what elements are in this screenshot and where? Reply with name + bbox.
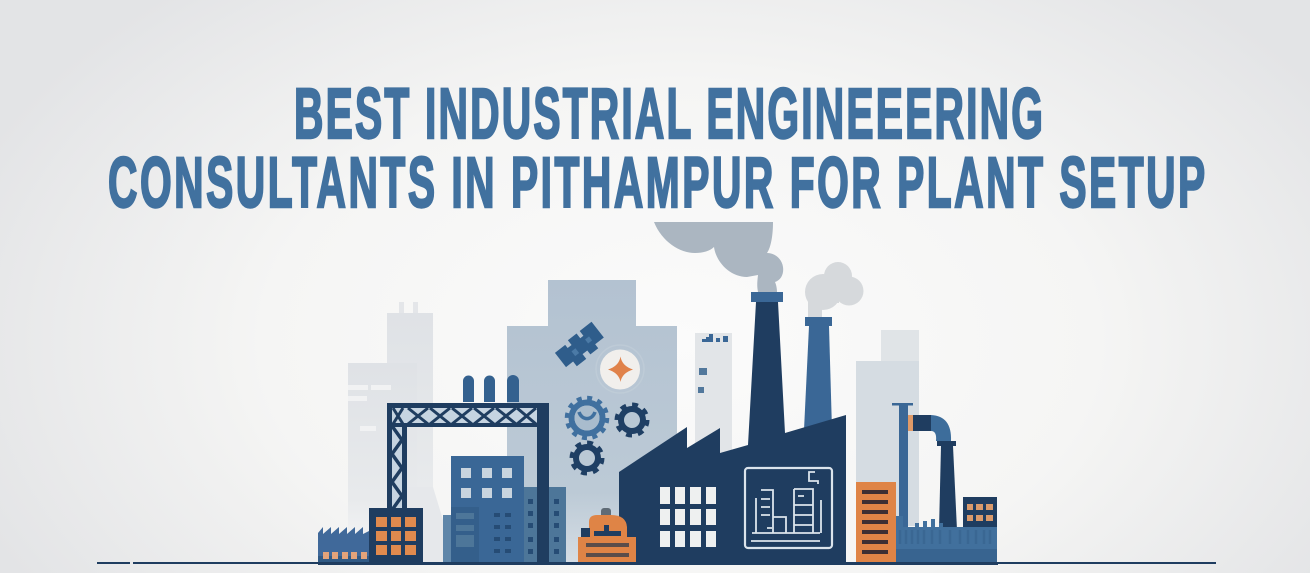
- dark block with orange windows: [369, 508, 423, 563]
- small sawtooth factory: [318, 527, 369, 563]
- large pale blue building: [507, 280, 677, 563]
- steel gantry: [387, 403, 549, 563]
- large smoke plume: [654, 222, 783, 292]
- blue building: [443, 456, 566, 563]
- ground line: [97, 562, 1216, 565]
- icon: dark gear bottom: [572, 442, 602, 474]
- blueprint panel: [745, 468, 832, 548]
- pipe and small chimney: [892, 403, 957, 530]
- gantry chimneys: [463, 375, 519, 402]
- factory windows: [660, 487, 716, 547]
- pale background buildings left: [348, 302, 443, 563]
- icon: linked blocks: [554, 322, 608, 372]
- small smoke plume: [805, 262, 864, 318]
- blue industrial base: [896, 516, 997, 563]
- main factory with chimney: [619, 292, 846, 563]
- icon: star badge: [596, 345, 644, 393]
- icon: dark gear right: [616, 404, 648, 436]
- windowed control box: [963, 497, 997, 527]
- title: [108, 74, 1205, 223]
- orange striped tower: [856, 482, 896, 563]
- pale tower centre: [695, 333, 732, 458]
- icon: light blue gear: [567, 398, 607, 438]
- title: CONSULTANTS IN PITHAMPUR FOR PLANT SETUP: [108, 143, 1205, 223]
- orange machine: [578, 508, 636, 563]
- rear chimney: [804, 317, 832, 430]
- right pale buildings: [856, 330, 919, 526]
- title: BEST INDUSTRIAL ENGINEEERING: [294, 74, 1043, 154]
